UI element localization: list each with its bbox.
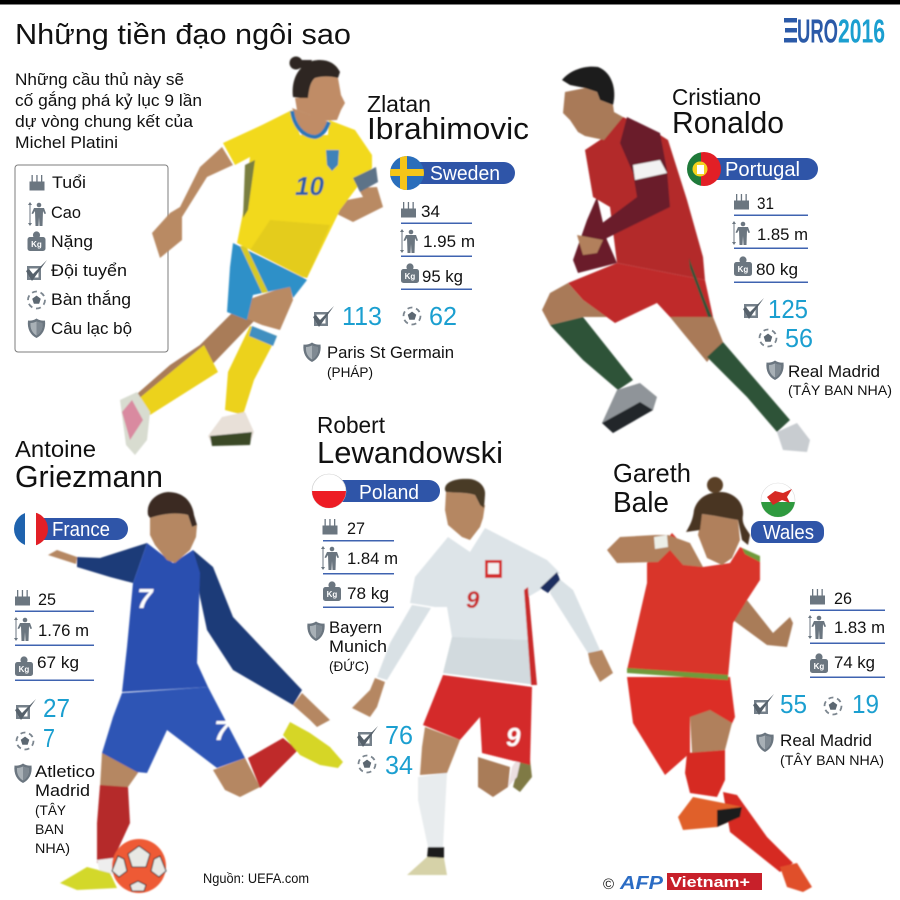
club: Real Madrid <box>788 363 880 381</box>
caps and goals: 55 <box>780 689 807 719</box>
caps and goals: 27 <box>43 693 70 723</box>
player name: Antoine <box>15 436 96 462</box>
stats: Kg <box>738 265 748 274</box>
legend: age <box>30 174 86 192</box>
country badge: Poland <box>312 474 440 508</box>
player name: Robert <box>317 412 386 438</box>
player name: Ronaldo <box>672 105 784 140</box>
club <box>307 619 387 674</box>
country badge: Sweden: Sweden <box>430 163 500 185</box>
panel: Griezmann <box>14 436 343 893</box>
stats: 95 kg <box>422 267 463 286</box>
caps and goals: 113 <box>342 301 382 331</box>
player photo: Ibrahimovic: 10 <box>295 171 324 201</box>
player name <box>613 458 691 519</box>
club: (TÂY BAN NHA) <box>780 752 884 768</box>
club: (ĐỨC) <box>329 658 369 674</box>
caps and goals: 76 <box>385 720 413 750</box>
player name: Gareth <box>613 458 691 488</box>
intro text <box>15 70 202 152</box>
legend: club: Câu lạc bộ <box>51 320 132 338</box>
club: BAN <box>35 821 64 837</box>
stats: Kg <box>814 662 824 671</box>
stats: 1.95 m <box>423 232 475 251</box>
credit: AFP Vietnam: © <box>603 876 614 893</box>
stats: Kg <box>405 272 415 281</box>
source: Nguồn: UEFA.com <box>203 871 309 886</box>
club: Paris St Germain <box>327 344 454 362</box>
legend: national team caps <box>26 260 127 281</box>
country badge: Poland: Poland <box>359 482 419 504</box>
legend: club <box>28 318 132 338</box>
player photo: Lewandowski: 9 <box>466 587 480 614</box>
player photo: Ibrahimovic <box>120 56 383 455</box>
club <box>303 342 454 380</box>
stats <box>808 589 885 678</box>
club: (TÂY BAN NHA) <box>788 382 892 398</box>
intro text: dự vòng chung kết của <box>15 112 194 131</box>
player name: Griezmann <box>15 459 163 494</box>
player name <box>15 436 163 494</box>
stats <box>400 202 475 290</box>
caps and goals <box>313 301 457 331</box>
player name: Ibrahimovic <box>367 111 529 146</box>
caps and goals: 7 <box>43 723 55 753</box>
player photo: Bale <box>607 477 812 892</box>
panel: legend <box>15 165 168 352</box>
panel: Bale <box>607 458 885 892</box>
player name: Lewandowski <box>317 435 503 470</box>
stats: 26 <box>834 589 852 608</box>
club: Madrid <box>35 782 90 800</box>
stats <box>321 519 398 608</box>
legend: national team caps: Đội tuyển <box>51 262 127 280</box>
stats: 78 kg <box>347 584 389 603</box>
panel: Ibrahimovic <box>120 56 529 455</box>
player photo: Griezmann: 7 <box>214 715 231 746</box>
legend: goals <box>28 290 131 309</box>
country badge: Sweden <box>390 156 515 190</box>
player photo: Griezmann: 7 <box>137 583 154 614</box>
country badge: Portugal: Portugal <box>725 159 800 181</box>
stats: 1.76 m <box>38 621 89 640</box>
intro text: cố gắng phá kỷ lục 9 lần <box>15 91 202 110</box>
legend: height <box>28 202 81 226</box>
club <box>14 763 95 856</box>
intro text: Michel Platini <box>15 133 118 152</box>
stats: 74 kg <box>834 653 875 672</box>
player name: Bale <box>613 487 669 519</box>
club: Munich <box>329 638 387 656</box>
club <box>756 732 884 768</box>
caps and goals: 56 <box>785 323 813 353</box>
stats: 25 <box>38 590 56 609</box>
caps and goals <box>15 693 70 753</box>
club: NHA) <box>35 840 70 856</box>
caps and goals: 34 <box>385 750 413 780</box>
club: (PHÁP) <box>327 364 373 380</box>
caps and goals: 125 <box>768 294 808 324</box>
credit: AFP Vietnam <box>603 873 762 893</box>
caps and goals <box>357 720 413 780</box>
legend: height: Cao <box>51 204 81 222</box>
club: Atletico <box>35 763 95 781</box>
stats: Kg <box>327 590 337 599</box>
country badge: Wales: Wales <box>763 522 814 544</box>
stats <box>14 590 94 681</box>
player photo: Lewandowski: 9 <box>506 722 521 752</box>
country badge: France <box>14 512 128 546</box>
legend: weight: Nặng <box>51 233 93 251</box>
player name <box>317 412 503 470</box>
stats: 31 <box>757 194 774 213</box>
stats: 80 kg <box>756 260 798 279</box>
stats: 34 <box>421 202 440 221</box>
club: Bayern <box>329 619 382 637</box>
player name <box>367 91 529 146</box>
player name <box>672 84 784 140</box>
stats: 27 <box>347 519 365 538</box>
player name: Zlatan <box>367 91 431 117</box>
legend: age: Tuổi <box>52 174 86 192</box>
caps and goals: 19 <box>852 689 879 719</box>
panel: Lewandowski <box>307 412 613 875</box>
credit: AFP Vietnam: AFP <box>619 873 664 893</box>
stats: 1.83 m <box>834 618 885 637</box>
logo: Euro 2016: URO <box>797 12 838 50</box>
player photo: Ronaldo <box>542 67 810 452</box>
legend: weight: Kg <box>31 240 42 249</box>
player photo: Griezmann <box>48 492 343 893</box>
player name: Cristiano <box>672 84 761 110</box>
stats: 1.84 m <box>347 549 398 568</box>
stats: 67 kg <box>37 653 79 672</box>
panel: Ronaldo <box>542 67 892 452</box>
club: Real Madrid <box>780 732 872 750</box>
stats: 1.85 m <box>757 225 808 244</box>
caps and goals: 62 <box>429 301 457 331</box>
player photo: Lewandowski <box>352 479 613 875</box>
caps and goals <box>753 689 879 719</box>
country badge: France: France <box>52 519 110 541</box>
caps and goals <box>743 294 813 353</box>
club: (TÂY <box>35 802 67 818</box>
stats: Kg <box>19 665 29 674</box>
stats <box>732 194 808 283</box>
title: Những tiền đạo ngôi sao <box>15 19 351 51</box>
country badge: Portugal <box>687 152 818 186</box>
country badge: Wales <box>751 483 824 544</box>
club <box>766 360 892 398</box>
credit: AFP Vietnam: Vietnam+ <box>670 874 750 891</box>
legend: goals: Bàn thắng <box>51 290 131 309</box>
intro text: Những cầu thủ này sẽ <box>15 70 184 89</box>
top black bar <box>0 0 900 4</box>
legend: weight <box>28 231 93 251</box>
